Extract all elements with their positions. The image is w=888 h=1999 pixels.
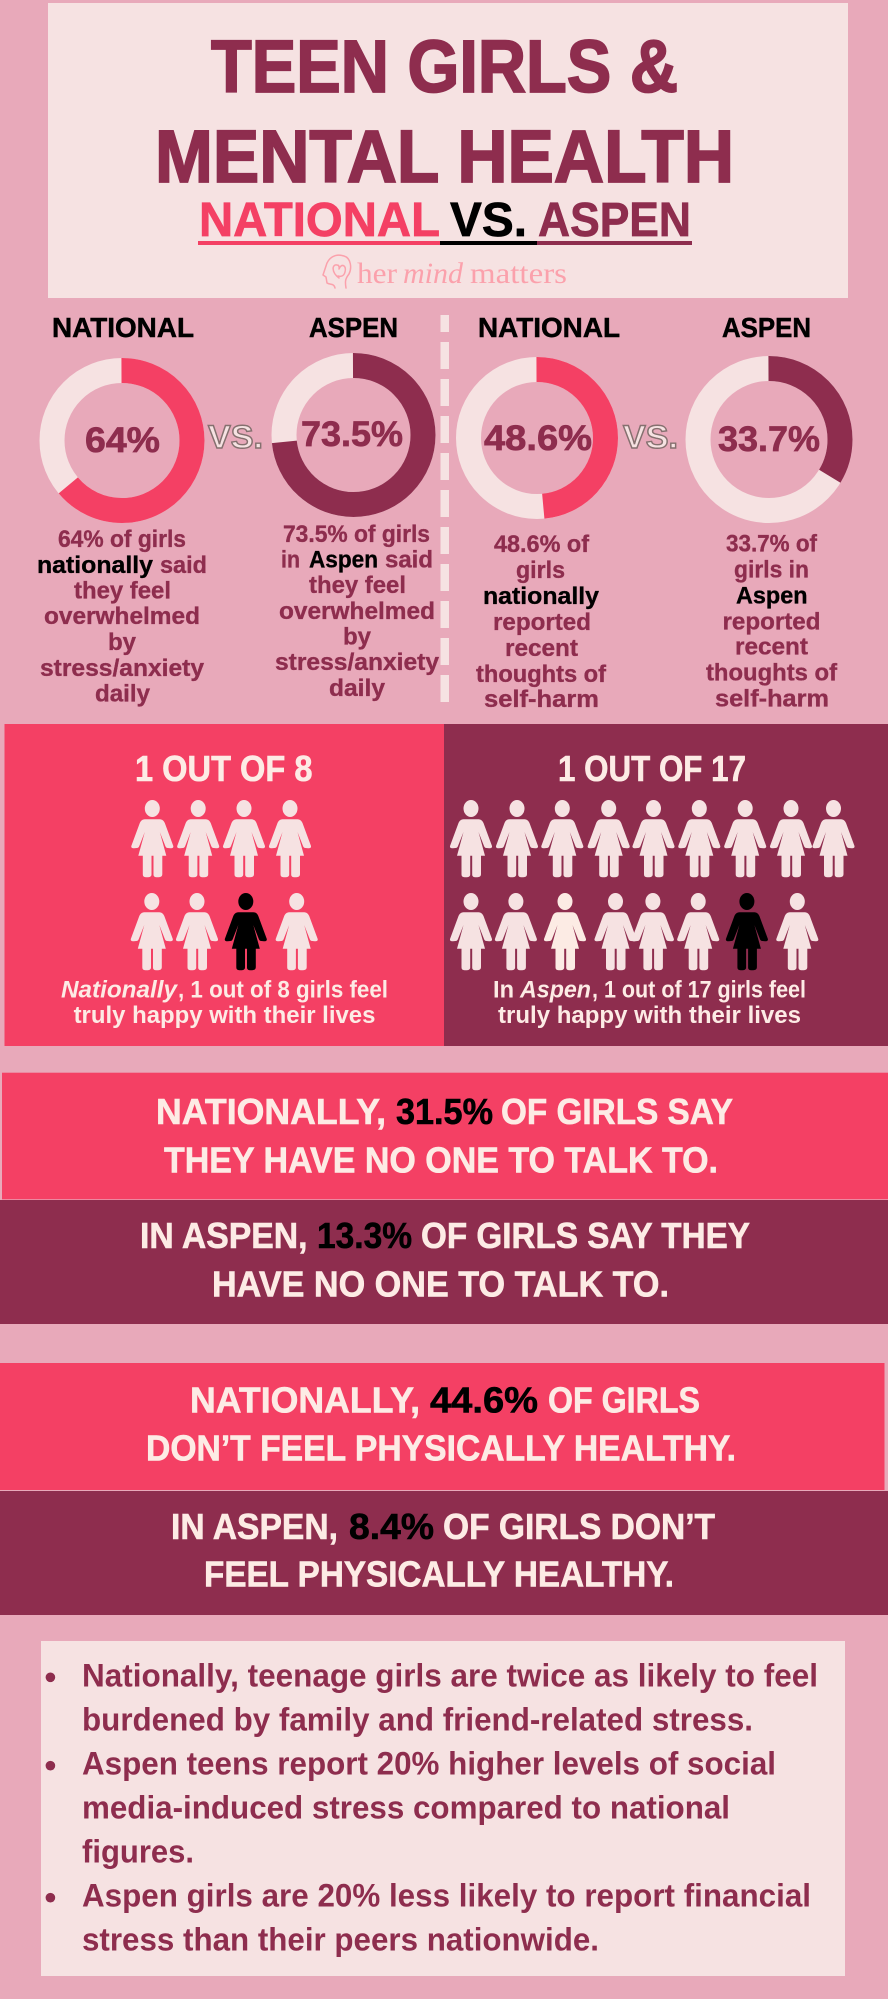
banner: aspen physically healthy: FEEL PHYSICALLY HEALTHY.: [204, 1554, 674, 1595]
text: 48.6% nationally self-harm: reported: [493, 609, 591, 636]
caption: , 1 out of 8 girls feel: [178, 977, 388, 1004]
text: 73.5% aspen overwhelmed: 73.5% of girls: [283, 521, 430, 548]
banner: national no one to talk to: OF GIRLS SAY: [501, 1091, 733, 1132]
dashed divider: [440, 315, 449, 702]
banner: aspen physically healthy: IN ASPEN,: [171, 1506, 338, 1547]
heading: national: NATIONAL: [478, 312, 620, 343]
title: TEEN GIRLS &: [211, 25, 678, 108]
panel: stress and anxiety comparison: [37, 312, 440, 708]
text: 64% nationally overwhelmed: stress/anxiety: [40, 655, 205, 682]
donut chart: 48.6% national: 48.6%: [484, 419, 592, 458]
panel: title header: [48, 3, 848, 298]
heading: 1 out of 17: 1 OUT OF 17: [558, 748, 746, 789]
caption: truly happy with their lives: [74, 1002, 375, 1029]
text: 48.6% nationally self-harm: girls: [516, 557, 565, 584]
donut chart: 48.6% national: [468, 370, 606, 506]
text: 33.7% aspen self-harm: reported: [722, 608, 820, 635]
text: 48.6% nationally self-harm: recent: [505, 635, 578, 662]
title: MENTAL HEALTH: [155, 115, 734, 198]
banner: national no one to talk to: NATIONALLY,: [156, 1091, 386, 1132]
bullet: social media stress: Aspen teens report 20% higher levels of social: [82, 1746, 776, 1782]
banner: aspen no one to talk to: OF GIRLS SAY THEY: [421, 1215, 750, 1256]
banner: aspen no one to talk to: IN ASPEN,: [140, 1215, 308, 1256]
text: 33.7% aspen self-harm: 33.7% of: [726, 531, 818, 558]
text: 73.5% aspen overwhelmed: overwhelmed: [279, 598, 435, 625]
caption: truly happy with their lives: [498, 1002, 801, 1029]
logo: her mind matters: matters: [470, 257, 567, 290]
bullet: social media stress: figures.: [82, 1834, 194, 1870]
text: 48.6% nationally self-harm: nationally: [483, 583, 600, 610]
heading: aspen: ASPEN: [722, 312, 811, 343]
banner: national no one to talk to: THEY HAVE NO ONE TO TALK TO.: [164, 1140, 718, 1181]
caption: [61, 977, 388, 1029]
text: 33.7% aspen self-harm: self-harm: [715, 686, 829, 713]
banner: aspen physically healthy: 8.4%: [349, 1506, 434, 1547]
text: 64% nationally overwhelmed: they feel: [74, 578, 171, 604]
text: 33.7% aspen self-harm: Aspen: [736, 582, 808, 609]
caption: Aspen: [519, 977, 591, 1004]
vs label: VS.: [623, 419, 678, 455]
banner: national physically healthy: DON’T FEEL PHYSICALLY HEALTHY.: [146, 1428, 736, 1469]
banner: national physically healthy: 44.6%: [430, 1380, 538, 1421]
heading: national: NATIONAL: [52, 312, 194, 343]
panel: key takeaways list: [41, 1641, 845, 1976]
panel: 1 out of 17 aspen: [444, 724, 888, 1046]
banner: aspen physically healthy: [0, 1491, 888, 1615]
caption: [493, 977, 806, 1029]
banner: aspen no one to talk to: HAVE NO ONE TO TALK TO.: [212, 1264, 669, 1305]
banner: aspen no one to talk to: 13.3%: [317, 1215, 412, 1256]
bullet: financial stress: [46, 1878, 811, 1958]
bullet: financial stress: Aspen girls are 20% less likely to report financial: [82, 1878, 811, 1914]
banner: aspen no one to talk to: [0, 1200, 888, 1324]
text: 64% nationally overwhelmed: nationally: [37, 552, 154, 579]
banner: national physically healthy: NATIONALLY,: [190, 1380, 420, 1421]
text: 33.7% aspen self-harm: [706, 531, 838, 713]
text: 64% nationally overwhelmed: by: [108, 629, 137, 656]
text: 64% nationally overwhelmed: overwhelmed: [44, 603, 200, 630]
bullet: twice as likely: burdened by family and friend-related stress.: [82, 1702, 753, 1738]
text: 73.5% aspen overwhelmed: [275, 521, 440, 702]
banner: national physically healthy: OF GIRLS: [548, 1380, 700, 1421]
caption: In: [493, 977, 514, 1004]
text: 73.5% aspen overwhelmed: Aspen: [309, 547, 378, 574]
icon row: girls, bottom with one highlighted: [450, 893, 818, 970]
donut chart: 73.5% aspen: [284, 366, 423, 504]
subtitle: national vs. aspen: NATIONAL: [199, 194, 440, 247]
text: 48.6% nationally self-harm: thoughts of: [476, 661, 607, 688]
banner: aspen physically healthy: OF GIRLS DON’T: [443, 1506, 715, 1547]
text: 73.5% aspen overwhelmed: by: [343, 624, 372, 650]
banner: national physically healthy: [0, 1363, 884, 1490]
subtitle: national vs. aspen: ASPEN: [538, 194, 691, 247]
panel: 1 out of 8 national: [4, 724, 444, 1046]
text: 48.6% nationally self-harm: self-harm: [484, 686, 599, 713]
text: 33.7% aspen self-harm: thoughts of: [706, 660, 838, 687]
logo: her mind matters: [323, 255, 567, 290]
donut chart: 33.7% aspen: [698, 368, 840, 510]
caption: Nationally: [61, 977, 179, 1004]
text: 73.5% aspen overwhelmed: said: [385, 547, 433, 574]
caption: , 1 out of 17 girls feel: [592, 977, 806, 1004]
donut chart: 64% national: [52, 370, 192, 510]
vs label: VS.: [208, 419, 263, 455]
icon row: girls, bottom with one highlighted: [131, 893, 318, 970]
subtitle: national vs. aspen: [198, 194, 692, 247]
text: 64% nationally overwhelmed: [37, 526, 207, 708]
text: 48.6% nationally self-harm: [476, 531, 607, 713]
banner: national no one to talk to: 31.5%: [396, 1091, 493, 1132]
text: 73.5% aspen overwhelmed: in: [281, 547, 300, 574]
logo: her mind matters: her: [357, 257, 397, 290]
icon row: girls, top: [131, 800, 311, 877]
bullet: financial stress: stress than their peers nationwide.: [82, 1922, 599, 1958]
bullet: social media stress: [46, 1746, 776, 1870]
text: 64% nationally overwhelmed: daily: [95, 680, 151, 708]
text: 33.7% aspen self-harm: girls in: [734, 557, 809, 584]
text: 73.5% aspen overwhelmed: daily: [329, 675, 386, 702]
panel: self-harm comparison: [468, 312, 840, 713]
text: 73.5% aspen overwhelmed: they feel: [309, 572, 406, 599]
donut chart: 73.5% aspen: 73.5%: [301, 415, 403, 454]
donut chart: 64% national: 64%: [85, 421, 160, 460]
title: [155, 25, 734, 198]
bullet: twice as likely: Nationally, teenage girls are twice as likely to feel: [82, 1658, 818, 1694]
text: 64% nationally overwhelmed: said: [160, 552, 207, 579]
icon row: girls, top: [450, 800, 855, 877]
banner: national no one to talk to: [2, 1073, 888, 1199]
heading: 1 out of 8: 1 OUT OF 8: [135, 748, 312, 789]
subtitle: national vs. aspen: VS.: [450, 194, 527, 247]
bullet: twice as likely: [46, 1658, 818, 1738]
donut chart: 33.7% aspen: 33.7%: [718, 420, 820, 459]
bullet: social media stress: media-induced stress compared to national: [82, 1790, 730, 1826]
text: 64% nationally overwhelmed: 64% of girls: [58, 526, 186, 553]
logo: her mind matters: mind: [403, 257, 464, 290]
text: 48.6% nationally self-harm: 48.6% of: [494, 531, 590, 558]
heading: aspen: ASPEN: [309, 312, 398, 343]
text: 33.7% aspen self-harm: recent: [735, 634, 808, 661]
text: 73.5% aspen overwhelmed: stress/anxiety: [275, 649, 440, 676]
